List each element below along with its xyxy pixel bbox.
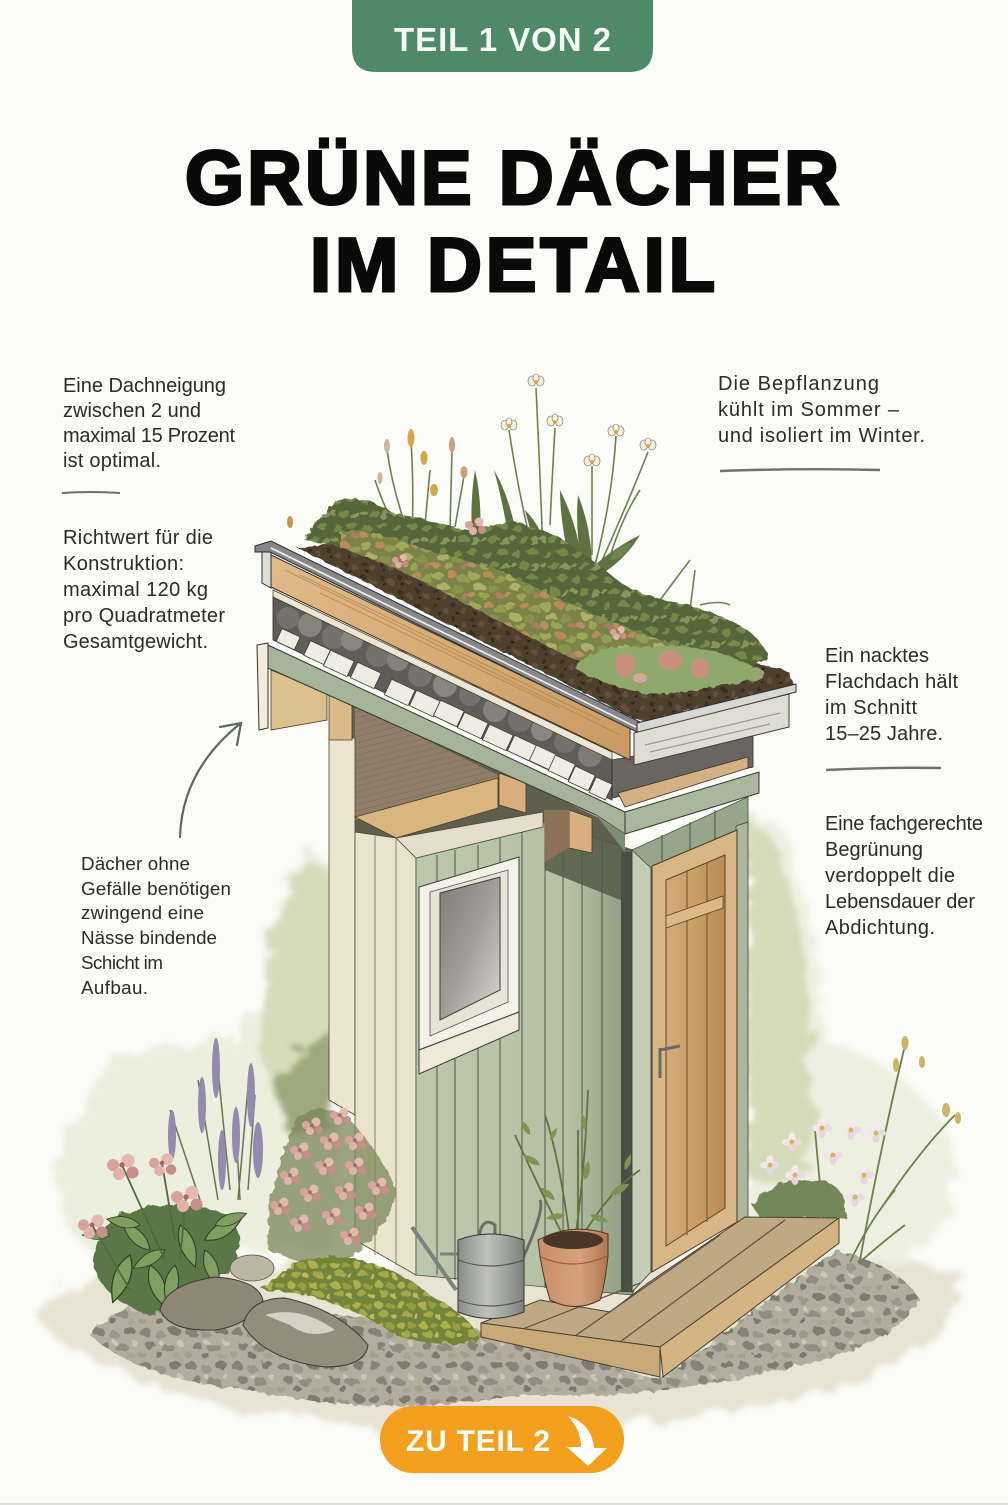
handle <box>478 1200 541 1260</box>
rosette pink leaves <box>615 650 709 683</box>
roof planting <box>287 374 768 695</box>
left mid foliage <box>261 860 335 1120</box>
pink flower heads <box>78 1153 202 1239</box>
herb foliage mass <box>305 499 768 680</box>
text block: flat roofs: Dächer ohne <box>81 853 190 874</box>
soil <box>296 540 794 722</box>
text block: planting benefits: kühlt im Sommer – <box>718 399 900 421</box>
text block: greening doubles lifespan: verdoppelt die <box>825 865 955 887</box>
white flowers <box>501 374 656 466</box>
badge: part 1 of 2 <box>352 0 653 72</box>
button: to part 2: ZU TEIL 2 <box>406 1425 550 1458</box>
text block: planting benefits <box>718 373 925 447</box>
broadleaf plant shade <box>94 1205 239 1315</box>
green side wall <box>416 822 633 1295</box>
plant leaves <box>519 1113 633 1225</box>
text block: roof pitch: Eine Dachneigung <box>63 375 226 397</box>
wooden blocks <box>499 773 592 853</box>
metal flashing along slope <box>255 541 640 732</box>
left cream corner post <box>329 738 355 1115</box>
right foliage wash <box>748 815 954 1260</box>
shelf top <box>355 778 498 838</box>
text block: bare flat roof lifespan: Flachdach hält <box>825 671 958 693</box>
gravel layer stones <box>277 607 602 767</box>
dark block <box>544 810 569 862</box>
lavender <box>168 1038 263 1200</box>
text block: flat roofs <box>81 853 231 998</box>
bracket <box>271 670 327 730</box>
door frame <box>652 830 737 1272</box>
plant stems <box>515 1090 640 1240</box>
window frame <box>419 857 519 1050</box>
bracket below corner <box>596 815 625 852</box>
window <box>419 857 519 1074</box>
can body <box>458 1234 524 1318</box>
left planting bed <box>78 1038 481 1367</box>
step front face <box>481 1323 660 1377</box>
leaves mass <box>752 1179 846 1218</box>
text block: flat roofs: Nässe bindende <box>81 927 217 948</box>
potted plant <box>515 1090 640 1306</box>
window glass <box>440 877 500 1020</box>
text block: flat roofs: Aufbau. <box>81 977 148 998</box>
title line 1: GRÜNE DÄCHER <box>185 136 839 221</box>
left foliage wash <box>55 850 340 1250</box>
green beam side <box>268 645 625 834</box>
text block: bare flat roof lifespan <box>825 645 958 745</box>
bottom edge line <box>0 1503 1008 1505</box>
background washes behind the shed <box>55 815 954 1260</box>
thin timber strip <box>273 590 612 760</box>
text block: flat roofs: Schicht im <box>81 952 163 973</box>
roof section <box>255 540 796 852</box>
text block: greening doubles lifespan: Eine fachgerechte <box>825 813 983 835</box>
flower stems <box>92 1163 186 1290</box>
button: to part 2 <box>380 1406 624 1473</box>
text block: flat roofs: zwingend eine <box>81 902 204 923</box>
pink blossoms <box>270 1108 389 1245</box>
text block: structural load <box>63 527 225 653</box>
window sill <box>419 1012 519 1074</box>
title line 2: IM DETAIL <box>310 223 715 308</box>
front cream corner board <box>355 832 416 1275</box>
left metal end <box>262 548 271 588</box>
text block: roof pitch: maximal 15 Prozent <box>63 425 235 447</box>
yellow and pink buds <box>287 429 468 528</box>
watering can <box>412 1200 541 1318</box>
left white post end <box>257 643 268 730</box>
door jamb side <box>632 845 651 1292</box>
step right face <box>660 1218 839 1377</box>
text block: roof pitch <box>63 375 235 472</box>
text block: greening doubles lifespan <box>825 813 983 939</box>
broad leaves <box>82 1208 248 1310</box>
text block: bare flat roof lifespan: im Schnitt <box>825 697 917 719</box>
cream lintel <box>396 812 543 858</box>
right mid foliage <box>748 820 815 1180</box>
window sash <box>430 870 508 1036</box>
text block: greening doubles lifespan: Lebensdauer der <box>825 891 975 913</box>
text block: planting benefits: Die Bepflanzung <box>718 373 879 395</box>
green strip right of door <box>736 822 748 1226</box>
rosette plants <box>575 646 764 695</box>
title <box>185 136 839 308</box>
left deep foliage <box>275 1030 335 1130</box>
door handle <box>660 1046 680 1078</box>
text block: greening doubles lifespan: Abdichtung. <box>825 917 935 939</box>
gravel <box>90 1250 920 1406</box>
astilbe foliage <box>268 1109 397 1270</box>
flowers <box>760 1118 886 1207</box>
interior rear planks <box>355 705 498 820</box>
door <box>652 830 737 1272</box>
white bricks <box>276 629 613 800</box>
wood fascia board <box>271 555 630 760</box>
wooden step <box>481 1217 839 1377</box>
upper left post <box>329 695 352 740</box>
text block: structural load: Richtwert für die <box>63 527 213 549</box>
text block: greening doubles lifespan: Begrünung <box>825 839 923 861</box>
text block: bare flat roof lifespan: Ein nacktes <box>825 645 929 667</box>
timber under gravel front <box>618 757 748 807</box>
step top <box>481 1217 839 1347</box>
yellow buds <box>893 1036 961 1124</box>
green beam front <box>625 772 759 834</box>
pink blossoms <box>392 518 627 640</box>
medium rock <box>160 1277 263 1330</box>
text block: planting benefits: und isoliert im Winter. <box>718 425 925 447</box>
wall shadow beneath overhang <box>545 822 633 905</box>
front flashing <box>637 684 796 733</box>
large rock <box>243 1298 368 1367</box>
text block: structural load: Gesamtgewicht. <box>63 631 208 653</box>
pot <box>538 1229 608 1306</box>
tall grass and flower stems <box>375 388 730 610</box>
text block: structural load: pro Quadratmeter <box>63 605 225 627</box>
stems <box>815 1045 955 1262</box>
sand wash <box>40 1259 965 1432</box>
badge: part 1 of 2: TEIL 1 VON 2 <box>394 21 611 58</box>
green planks above door <box>632 797 748 868</box>
gravel layer front <box>612 735 753 798</box>
ground cover <box>262 1257 481 1344</box>
icon: down arrow <box>567 1416 607 1466</box>
text block: bare flat roof lifespan: 15–25 Jahre. <box>825 723 943 745</box>
text block: structural load: maximal 120 kg <box>63 579 208 601</box>
spout <box>412 1227 456 1290</box>
dark door gap <box>621 852 634 1292</box>
interior shadow <box>350 700 625 1000</box>
text block: structural load: Konstruktion: <box>63 553 184 575</box>
small rock <box>230 1255 274 1281</box>
sedum carpet <box>340 530 690 688</box>
right planting bed <box>752 1036 961 1262</box>
text block: roof pitch: ist optimal. <box>63 450 161 472</box>
ground: sand wash and gravel <box>40 1250 965 1432</box>
gravel layer side <box>273 597 612 800</box>
front fascia board <box>634 694 789 765</box>
door leaf <box>666 855 725 1246</box>
spiky leaves <box>471 470 640 575</box>
arrow: slope pointer <box>180 723 241 837</box>
shed <box>257 643 748 1295</box>
text block: roof pitch: zwischen 2 und <box>63 400 201 422</box>
text block: flat roofs: Gefälle benötigen <box>81 878 231 899</box>
